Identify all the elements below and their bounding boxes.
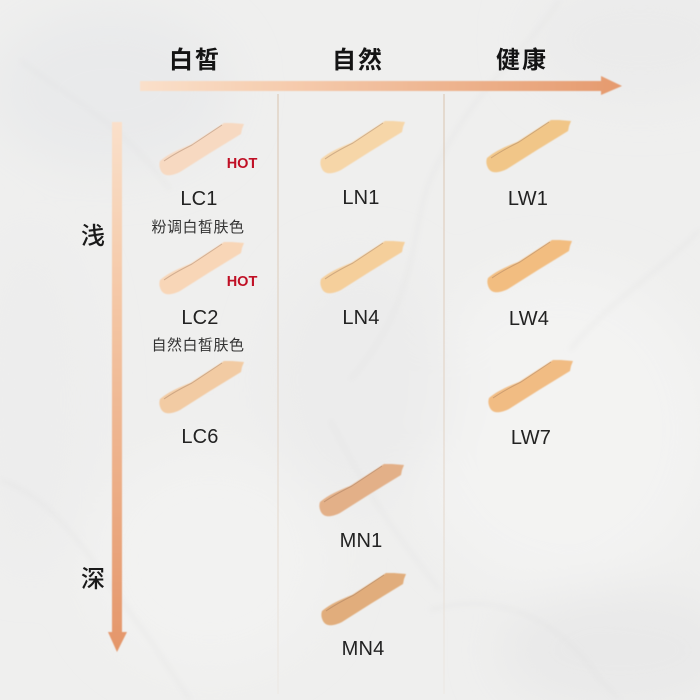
- shade LN4: [320, 241, 405, 329]
- shade LN1: [320, 121, 405, 209]
- arrow: vertical depth scale: [108, 122, 127, 652]
- shade LC2: [151, 242, 257, 354]
- name MN4: MN4: [342, 638, 384, 660]
- column dividers: [278, 94, 444, 694]
- shade LW4: [487, 240, 572, 330]
- shade LC1: [151, 123, 257, 236]
- description LC1: 粉调白皙肤色: [151, 219, 245, 236]
- hot tag LC2: HOT: [227, 274, 257, 290]
- shade LC6: [159, 361, 244, 448]
- name LW7: LW7: [511, 427, 551, 449]
- name LC2: LC2: [181, 307, 219, 329]
- hot tag LC1: HOT: [227, 156, 257, 172]
- arrow: horizontal tone scale: [140, 76, 622, 95]
- shade LW1: [486, 120, 571, 210]
- name LN4: LN4: [342, 307, 380, 329]
- name LC1: LC1: [180, 188, 218, 210]
- name LC6: LC6: [181, 426, 219, 448]
- shade MN1: [319, 464, 404, 552]
- label: 深: 深: [81, 566, 105, 593]
- heading: 自然: 自然: [332, 47, 384, 74]
- name LW1: LW1: [508, 188, 548, 210]
- name LW4: LW4: [509, 308, 549, 330]
- heading: 健康: 健康: [496, 47, 548, 74]
- shade LW7: [488, 360, 573, 449]
- label: 浅: 浅: [81, 223, 105, 250]
- shade MN4: [321, 573, 406, 660]
- heading: 白皙: 白皙: [169, 47, 221, 74]
- description LC2: 自然白皙肤色: [151, 337, 245, 354]
- name MN1: MN1: [340, 530, 382, 552]
- name LN1: LN1: [342, 187, 380, 209]
